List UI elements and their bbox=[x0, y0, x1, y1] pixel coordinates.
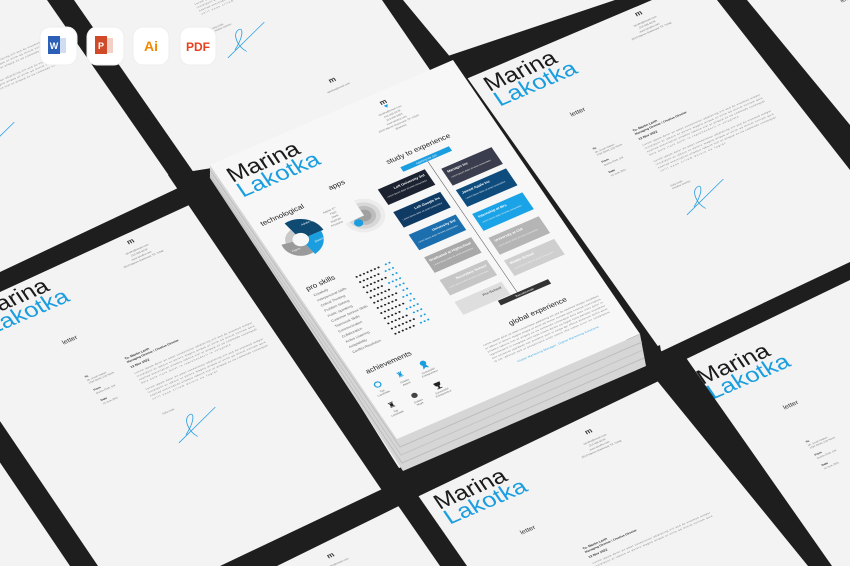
timeline: Lorem ipsum dolor sit amet consectetur bbox=[402, 202, 443, 221]
achievement icons: ♜ bbox=[394, 369, 406, 380]
skill list: Conflict Resolution bbox=[352, 339, 382, 354]
letter page: top right: letter bbox=[569, 106, 588, 118]
resume top sheet bbox=[210, 60, 640, 439]
global experience text: ullamco laboris nisi ut aliquip ex ea commodo consequat duis aute irure dolor in bbox=[487, 300, 604, 353]
letter page: left: 1234 Street, City Name bbox=[88, 371, 116, 385]
chart: technological donut: Sketch bbox=[314, 236, 325, 243]
skill list: Teamwork Skills bbox=[334, 314, 361, 328]
achievement icons: Golden bbox=[399, 377, 410, 384]
chart: apps rings: Illustrator bbox=[330, 216, 343, 224]
achievement icons: Top bbox=[392, 408, 399, 413]
heading: global experience: global experience bbox=[507, 295, 569, 327]
letter page: bottom center bbox=[429, 404, 714, 566]
timeline: University at CUI bbox=[494, 227, 524, 242]
letter page: top right: Lorem ipsum dolor sit amet consectetur adipiscing elit sed do eiusmod tempor bbox=[653, 109, 772, 163]
timeline: Left University 3rd bbox=[393, 173, 426, 190]
letter page: left: 12 June 2022 bbox=[102, 396, 119, 405]
achievement icons: Successful bbox=[421, 366, 436, 375]
achievement icons bbox=[369, 357, 453, 418]
timeline: Lorem ipsum dolor sit amet consectetur bbox=[451, 159, 492, 179]
name title: Marina bbox=[222, 137, 305, 187]
timeline: University 3rd bbox=[431, 219, 456, 232]
global experience text: sint occaecat cupidatat non proident sunt in culpa qui officia deserunt mollit anim bbox=[491, 307, 609, 360]
timeline: Joined Apple Inc bbox=[461, 180, 491, 195]
skill dot rating grid bbox=[357, 263, 429, 334]
letter page: bottom right: From bbox=[814, 450, 823, 457]
letter page: bottom right: 12 June 2022 bbox=[823, 461, 840, 470]
letter page: bottom right: Sophia Clark, GM bbox=[816, 449, 837, 460]
letter page: bottom center: www.lakotka.com bbox=[588, 439, 611, 452]
heading: apps: apps bbox=[326, 178, 347, 192]
achievement icons: Successful bbox=[434, 386, 450, 395]
letter page: top right: Lorem ipsum dolor sit amet consectetur adipiscing elit sed do eiusmod tempor bbox=[641, 93, 761, 147]
letter page: bottom center: To. Martin Larth bbox=[582, 537, 608, 551]
letter page: top center: Creative Director bbox=[213, 23, 233, 33]
logo and contact: www.lakotka.com bbox=[386, 114, 408, 126]
global experience text: id est laborum sed ut perspiciatis unde omnis iste natus error sit voluptatem bbox=[493, 310, 611, 363]
letter page: bottom right: Mr. Jonah Hadner bbox=[807, 436, 829, 447]
letter page: bottom left: m bbox=[325, 550, 336, 560]
skill list: Creativity bbox=[313, 288, 329, 297]
letter page: top center: Sofia Clark bbox=[211, 23, 225, 30]
logo and contact: m bbox=[377, 97, 389, 107]
letter page: top right: To. bbox=[592, 146, 598, 151]
icon: PDF: PDF bbox=[186, 40, 210, 54]
chart: apps rings: Adobe XD bbox=[322, 206, 337, 215]
letter page: left: m bbox=[125, 236, 136, 246]
chart: technological donut: Figma bbox=[291, 246, 301, 253]
letter page: top right: nostrud exercitation ullamco laboris nisi ut aliquip ex ea commodo consequat bbox=[657, 115, 777, 169]
letter page: left: incididunt ut labore et dolore magna aliqua ut enim ad minim veniam quis bbox=[147, 340, 267, 394]
timeline: Applying for Job bbox=[415, 153, 438, 165]
skill list: Customer Service Skills bbox=[330, 304, 369, 323]
logo and contact: 212-465-6655 bbox=[385, 112, 404, 122]
timeline: Internship at Mrs bbox=[477, 203, 507, 219]
letter page: top right: Sofia Clark bbox=[670, 180, 684, 187]
letter page: bottom right: letter bbox=[782, 399, 801, 411]
achievement icons: Golden bbox=[413, 397, 424, 404]
letter page: top right: Marina bbox=[479, 46, 562, 96]
letter page: bottom center: 2610 Warren Boulevard, TX 71042 bbox=[581, 439, 623, 459]
heading: study to experience: study to experience bbox=[384, 132, 452, 166]
heading: achievements: achievements bbox=[364, 349, 414, 375]
icon: Word bbox=[40, 27, 77, 65]
letter page: left: Mr. Jonah Hadner bbox=[86, 371, 108, 382]
letter page: left: Lorem ipsum dolor sit amet consectetur adipiscing elit sed do eiusmod tempor bbox=[145, 337, 264, 391]
global experience text bbox=[482, 294, 616, 371]
letter page: left: Lorem ipsum dolor sit amet consectetur adipiscing elit sed do eiusmod tempor bbox=[133, 321, 253, 375]
app icons row bbox=[40, 27, 216, 65]
timeline: Lorem ipsum dolor sit amet consectetur bbox=[448, 270, 490, 289]
letter page: left: duis aute irure dolor in reprehenderit in voluptate bbox=[140, 343, 232, 384]
chart: technological donut bbox=[271, 212, 334, 263]
letter page: left: velit esse cillum dolore eu fugiat bbox=[151, 369, 218, 401]
icon: Illustrator bbox=[133, 27, 169, 65]
letter page: left: www.lakotka.com bbox=[130, 249, 153, 262]
letter page: top right: Managing Director / Creative Director bbox=[634, 110, 688, 136]
icon: Word: W bbox=[50, 41, 59, 51]
global experience text: ut labore et dolore magna aliqua ut enim ad minim veniam quis nostrud exercitation bbox=[484, 297, 602, 350]
letter page: left: Managing Director / Creative Director bbox=[126, 338, 180, 364]
letter page: bottom center: Lorem ipsum dolor sit amet consectetur adipiscing elit sed do eiusmod tempor bbox=[591, 511, 711, 565]
timeline: Lorem ipsum dolor sit amet consectetur bbox=[417, 224, 459, 244]
timeline: Lorem ipsum dolor sit amet consectetur bbox=[481, 204, 523, 224]
letter page: top right: Sophia Clark, GM bbox=[603, 156, 624, 167]
timeline: Lorem ipsum dolor sit amet consectetur bbox=[498, 228, 539, 248]
timeline: Graduated at Highschool bbox=[428, 241, 472, 262]
skill list: Communication bbox=[338, 320, 363, 333]
timeline: Lorem ipsum dolor sit amet consectetur bbox=[513, 251, 555, 270]
achievement icons: Muyk bbox=[416, 400, 425, 407]
timeline: Lorem ipsum dolor sit amet consectetur bbox=[387, 179, 428, 199]
skill list: Critical Thinking bbox=[320, 294, 346, 308]
letter page: left: 2610 Warren Boulevard, TX 71042 bbox=[123, 249, 165, 269]
heading: pro skills: pro skills bbox=[304, 273, 337, 293]
letter page: left: 212-465-6678 bbox=[130, 247, 149, 257]
letter page: top right: lakotka@email.com bbox=[633, 14, 658, 28]
letter page: bottom right: To. bbox=[805, 439, 811, 444]
letter page: top right bbox=[479, 0, 808, 254]
achievement icons: Entrepreneur bbox=[421, 369, 439, 378]
letter page: top right: Lakotka bbox=[489, 56, 582, 111]
logo and contact: lakotka@email.com bbox=[378, 104, 403, 117]
letter page: top right: Date bbox=[608, 168, 616, 174]
letter page: bottom center: Marina bbox=[429, 464, 512, 514]
skill list: Problem Solving bbox=[323, 299, 350, 313]
letter page: left: letter bbox=[61, 334, 80, 346]
letter page: top center: m bbox=[326, 75, 338, 85]
letter page: top right: 2610 Warren Boulevard, TX 71042 bbox=[631, 21, 673, 41]
letter page: top right: nostrud exercitation ullamco laboris nisi ut aliquip ex ea commodo consequat bbox=[646, 99, 766, 153]
chart: apps rings: Photoshop bbox=[330, 219, 346, 228]
letter page: left: To. bbox=[84, 374, 90, 379]
logo and contact bbox=[362, 89, 422, 137]
letter page: top right: From bbox=[601, 157, 610, 164]
logo and contact: 212-465-6678 bbox=[383, 108, 402, 119]
letter page: left: To. Martin Larth bbox=[124, 347, 150, 361]
letter page: left: Date bbox=[100, 396, 108, 402]
skill list: Adaptability bbox=[348, 338, 368, 349]
letter page: left: incididunt ut labore et dolore magna aliqua ut enim ad minim veniam quis bbox=[136, 324, 256, 378]
letter page: left: 12 Nov 2022 bbox=[130, 358, 150, 369]
achievement icons: Top bbox=[379, 388, 386, 393]
letter page: top right: 212-465-6678 bbox=[638, 19, 657, 29]
resume paper stack side bbox=[210, 165, 646, 471]
letter page: top right: www.lakotka.com bbox=[638, 21, 661, 34]
timeline: Secondary School bbox=[455, 264, 487, 280]
achievement icons: Award bbox=[402, 380, 412, 387]
icon: PDF bbox=[180, 27, 216, 65]
letter page: bottom center: Managing Director / Creative Director bbox=[584, 528, 638, 554]
letter page: left: Sofia Clark bbox=[162, 408, 176, 415]
skill list: Public Speaking bbox=[327, 304, 353, 318]
letter page: bottom center: m bbox=[583, 426, 594, 436]
letter page: left bbox=[0, 214, 300, 482]
skill list: Collaboration bbox=[341, 327, 363, 339]
timeline: Middle School bbox=[509, 252, 535, 265]
achievement icons: ♜ bbox=[385, 399, 398, 410]
letter page: top right: 12 Nov 2022 bbox=[638, 130, 658, 141]
timeline: Pre-School bbox=[482, 286, 502, 297]
letter page: top right: 12 June 2022 bbox=[610, 168, 627, 177]
achievement icons: Entrepreneur bbox=[435, 389, 453, 398]
letter page: top right: Mr. Jonah Hadner bbox=[594, 143, 616, 154]
letter page: top right: incididunt ut labore et dolore magna aliqua ut enim ad minim veniam quis bbox=[644, 96, 764, 150]
achievement icons: Candidate bbox=[390, 409, 405, 418]
name title: Lakotka bbox=[232, 147, 325, 202]
global experience text: Lorem ipsum dolor sit amet consectetur adipiscing elit sed do eiusmod tempor incididunt bbox=[482, 294, 599, 347]
letter page: bottom left bbox=[318, 546, 350, 566]
global experience text: Global Marketing Manager, Digital Marketing Solutions bbox=[516, 325, 600, 363]
timeline: Lorem ipsum dolor sit amet consectetur bbox=[433, 247, 474, 266]
global experience text: reprehenderit in voluptate velit esse cillum dolore eu fugiat nulla pariatur excepteur bbox=[489, 304, 606, 357]
icon: PowerPoint bbox=[87, 27, 124, 65]
letter page: top right: duis aute irure dolor in reprehenderit in voluptate bbox=[648, 115, 740, 156]
timeline: Baccalaureate bbox=[515, 287, 535, 298]
letter page: bottom center: 12 Nov 2022 bbox=[588, 548, 608, 559]
letter page: left: Sophia Clark, GM bbox=[95, 384, 116, 395]
letter page: bottom right: Lakotka bbox=[702, 349, 795, 404]
chart: apps rings: Figma bbox=[329, 209, 339, 216]
letter page: bottom center: Lakotka bbox=[439, 474, 532, 529]
icon: PowerPoint: P bbox=[98, 41, 104, 51]
letter page: left: nostrud exercitation ullamco laboris nisi ut aliquip ex ea commodo consequat bbox=[138, 327, 258, 381]
letter page: top right: velit esse cillum dolore eu fugiat bbox=[659, 141, 726, 173]
letter page: top left bbox=[0, 36, 98, 158]
letter page: left: From bbox=[93, 385, 102, 392]
skill list: Active Listening bbox=[345, 330, 371, 344]
letter page: bottom right: Date bbox=[821, 461, 829, 467]
timeline bbox=[371, 132, 577, 320]
timeline: Manager Inc bbox=[446, 161, 469, 173]
achievement icons: Candidate bbox=[377, 389, 391, 398]
logo and contact: @lakotka bbox=[394, 123, 408, 131]
letter page: bottom center: 212-465-6678 bbox=[588, 437, 607, 447]
letter page: top right: Creative Director bbox=[672, 180, 692, 190]
letter page: bottom center: lakotka@email.com bbox=[583, 432, 608, 446]
skill list bbox=[313, 278, 390, 354]
letter page: top right: To. Martin Larth bbox=[632, 119, 658, 133]
heading: technological: technological bbox=[258, 202, 306, 228]
skill list: Interpersonal Skills bbox=[316, 287, 347, 302]
letter page: left: lakotka@email.com bbox=[125, 242, 150, 256]
logo and contact: 2610 Warren Boulevard, TX 71042 bbox=[378, 113, 420, 134]
timeline: Left Google Inc bbox=[414, 196, 441, 210]
letter page: top right: m bbox=[633, 8, 644, 18]
letter page: top right: incididunt ut labore et dolore magna aliqua ut enim ad minim veniam quis bbox=[655, 112, 775, 166]
letter page: bottom right: 1234 Street, City Name bbox=[809, 436, 837, 450]
letter page: top center: lakotka@email.com bbox=[326, 81, 352, 94]
letter page: bottom center: letter bbox=[519, 524, 538, 536]
timeline: Lorem ipsum dolor sit amet consectetur bbox=[465, 180, 506, 200]
letter page: top right: 1234 Street, City Name bbox=[596, 143, 624, 157]
letter page: bottom right bbox=[692, 334, 850, 492]
chart: apps rings: Sketch bbox=[331, 212, 341, 219]
letter page: bottom right: Marina bbox=[692, 339, 775, 389]
chart: technological donut: Adobe XD bbox=[300, 218, 315, 226]
icon: Illustrator: Ai bbox=[144, 38, 158, 54]
letter page: top center bbox=[191, 0, 390, 119]
chart: apps rings bbox=[321, 190, 393, 244]
letter page: left: nostrud exercitation ullamco laboris nisi ut aliquip ex ea commodo consequat bbox=[149, 343, 269, 397]
